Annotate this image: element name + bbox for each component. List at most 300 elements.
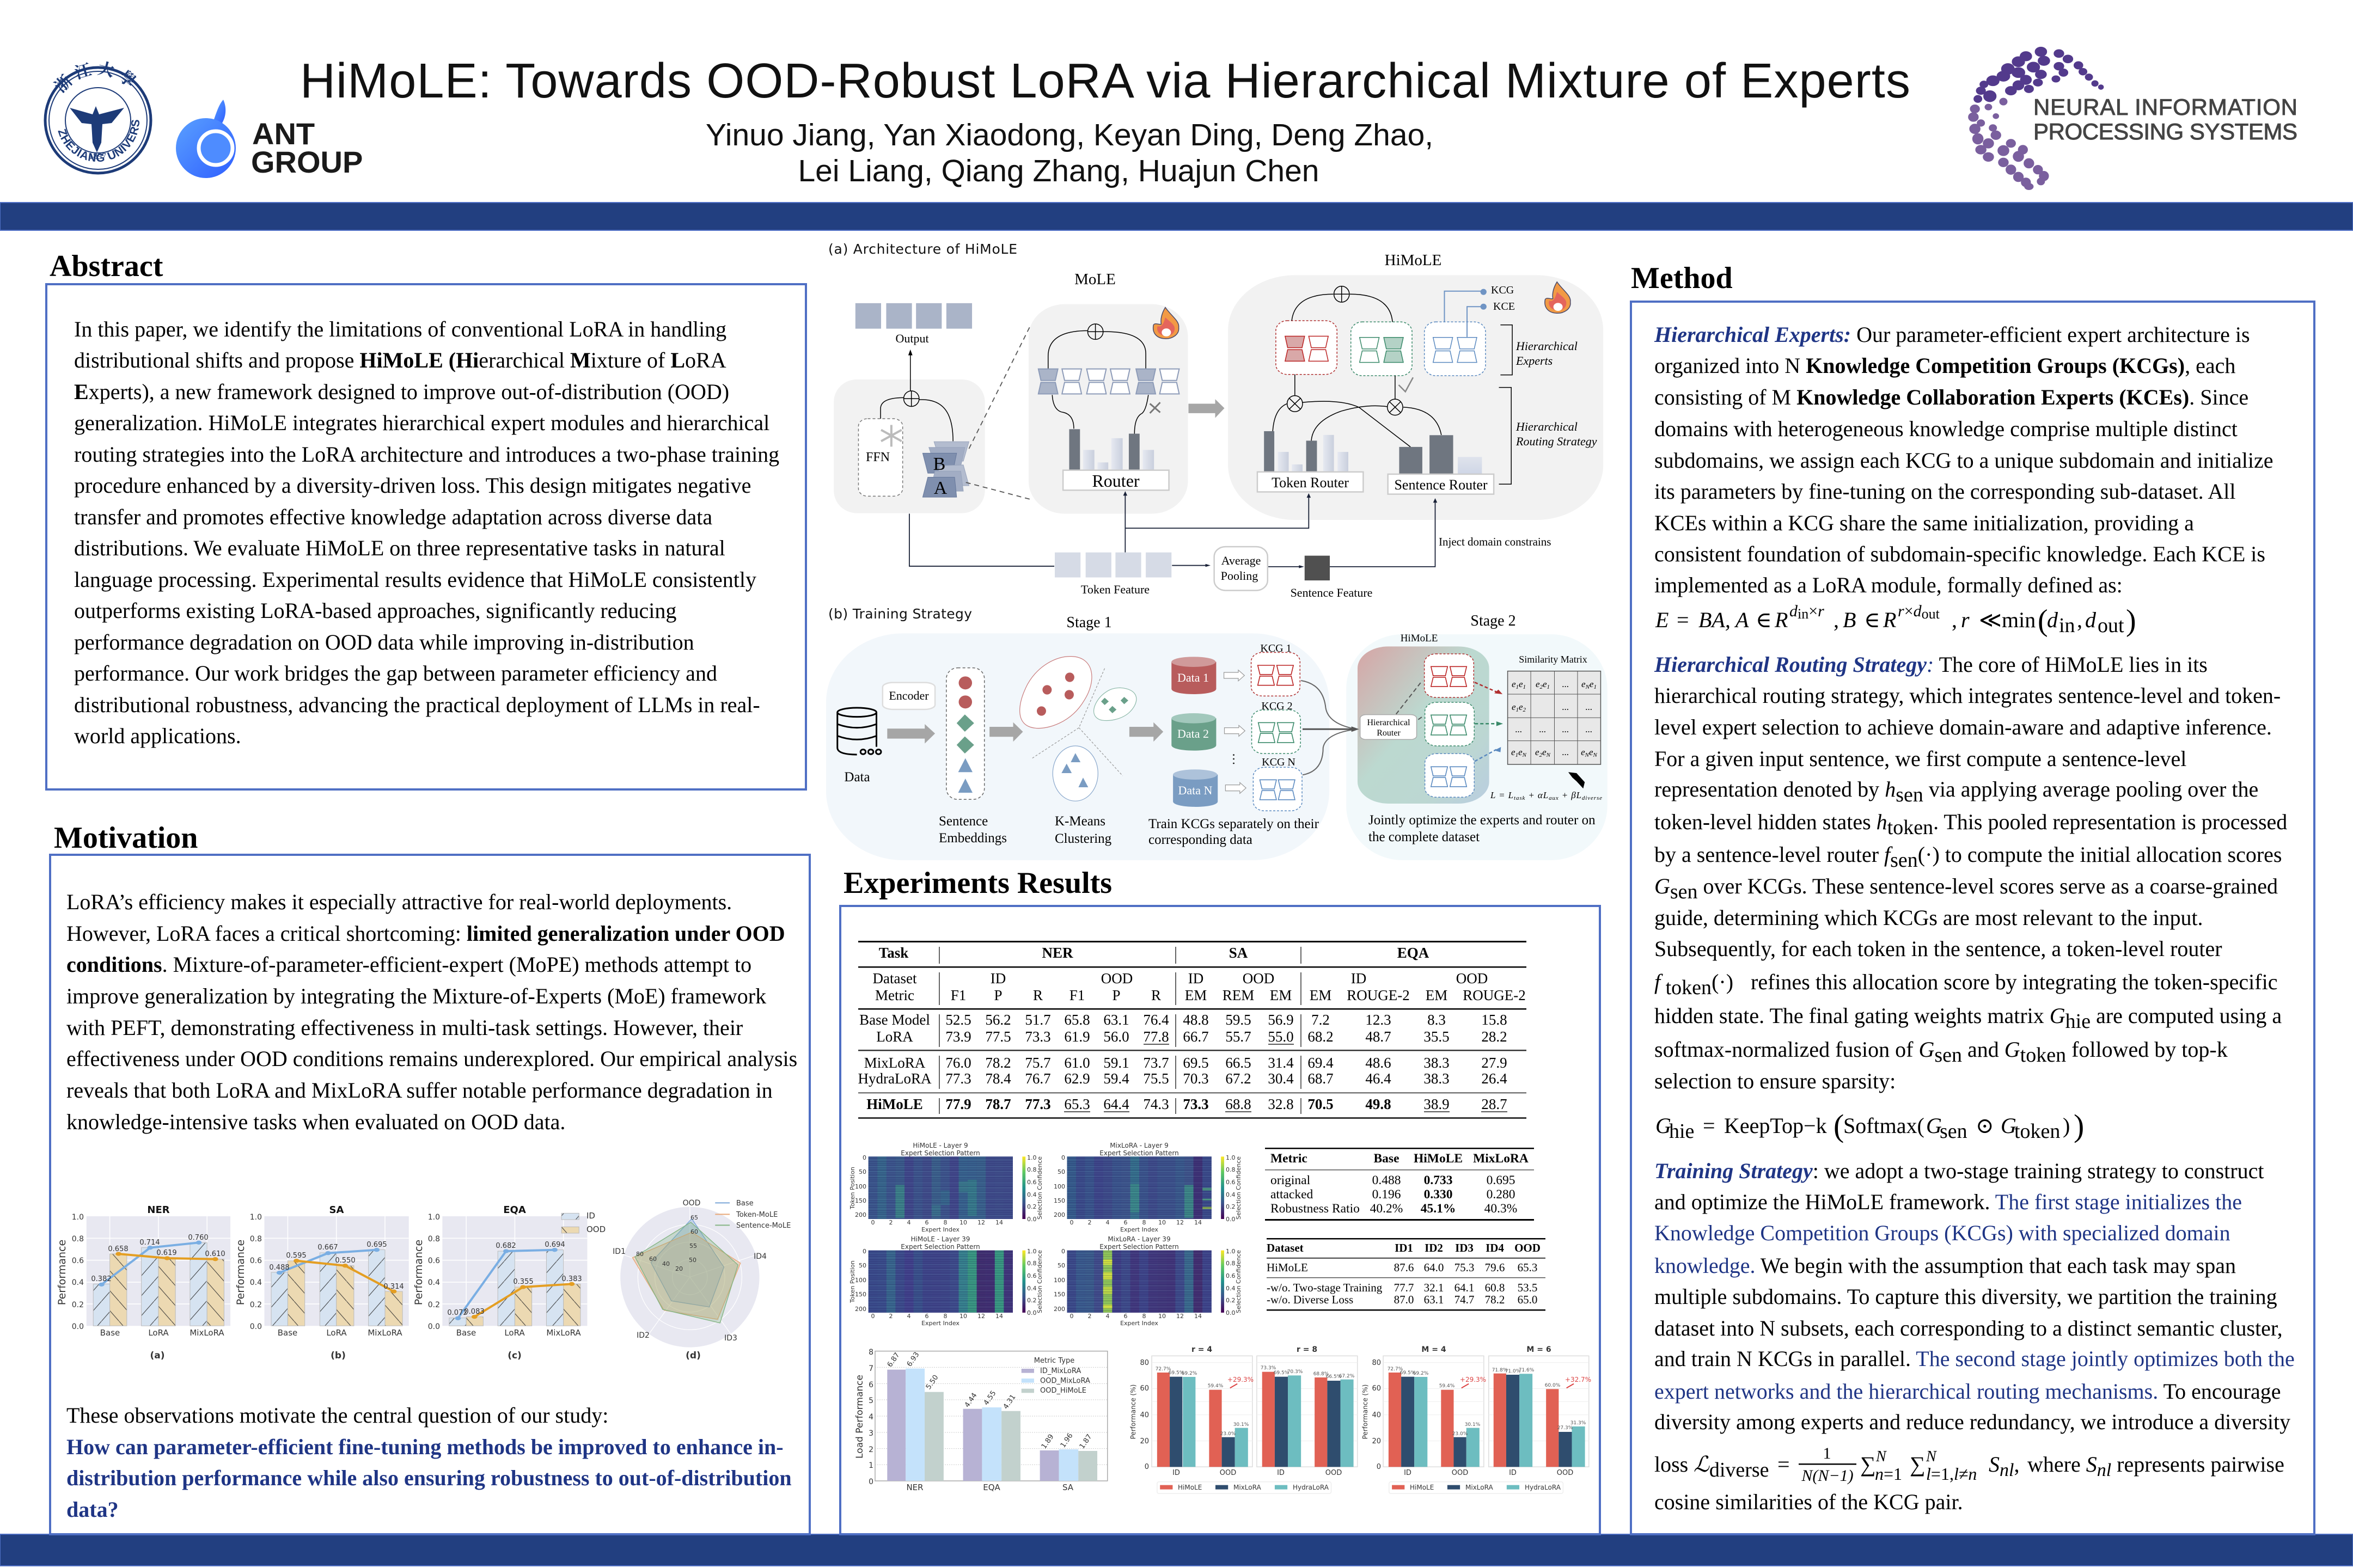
table: main results: Metric — [875, 987, 914, 1003]
heatmaps: expert selection pattern: 14 — [1194, 1313, 1202, 1320]
diagram labels b: L = L — [1490, 790, 1513, 800]
diagram labels b: N — [1585, 752, 1590, 758]
motivation text: How can parameter-efficient fine-tuning methods be improved to enhance in- — [66, 1435, 784, 1459]
table: main results: 48.8 — [1183, 1012, 1209, 1028]
table: main results: 51.7 — [1025, 1012, 1051, 1028]
method: training strategy: S — [1989, 1452, 2000, 1477]
chart: performance bars NER SA EQA: 0.550 — [335, 1257, 356, 1265]
chart: performance bars NER SA EQA: 0.488 — [269, 1264, 290, 1272]
heatmaps: expert selection pattern: 8 — [943, 1313, 948, 1320]
chart: hyperparameter sensitivity bars: OOD — [1325, 1469, 1342, 1477]
chart: hyperparameter sensitivity bars: 60 — [1140, 1385, 1149, 1393]
method: hierarchical routing strategy: sen — [1890, 849, 1918, 872]
table: ablation by dataset: 77.7 — [1394, 1281, 1414, 1294]
table: ablation by dataset: 75.3 — [1454, 1261, 1474, 1274]
method: training strategy: l=1,l≠n — [1926, 1464, 1977, 1484]
table: main results: EM — [1310, 987, 1331, 1003]
chart: hyperparameter sensitivity bars: 80 — [1140, 1359, 1149, 1367]
method: training strategy: nl — [2097, 1460, 2111, 1480]
chart: load performance: EQA — [983, 1483, 1001, 1492]
heatmaps: expert selection pattern: 100 — [855, 1183, 866, 1190]
table: main results: OOD — [1456, 970, 1488, 987]
diagram labels b: Train KCGs separately on their — [1148, 817, 1319, 831]
chart: performance bars NER SA EQA: 0.6 — [72, 1257, 84, 1265]
heatmaps: expert selection pattern: 0 — [1069, 1313, 1074, 1320]
chart: radar (d): 60 — [690, 1228, 698, 1235]
diagram labels b: Embeddings — [939, 831, 1007, 846]
chart: hyperparameter sensitivity bars: 20 — [1372, 1437, 1381, 1445]
heatmaps: expert selection pattern: 6 — [925, 1313, 929, 1320]
diagram labels a: Pooling — [1221, 569, 1258, 583]
heatmaps: expert selection pattern: 0.0 — [1027, 1216, 1037, 1223]
logo: Zhejiang University seal: 1897 — [89, 152, 106, 161]
diagram labels b: the complete dataset — [1368, 830, 1480, 844]
heatmaps: expert selection pattern: Expert Selection Pattern — [1099, 1149, 1179, 1157]
table: main results: 8.3 — [1427, 1012, 1446, 1028]
chart: load performance: ID_MixLoRA — [1040, 1367, 1081, 1375]
heading: Abstract: Abstract — [50, 249, 163, 283]
chart: performance bars NER SA EQA: MixLoRA — [546, 1328, 581, 1338]
heatmaps: expert selection pattern: 12 — [1176, 1219, 1184, 1226]
heatmaps: expert selection pattern: Expert Index — [1120, 1320, 1158, 1327]
table: main results: 67.2 — [1225, 1070, 1251, 1087]
chart: radar (d): ID1 — [613, 1247, 626, 1256]
heatmaps: expert selection pattern: 0.6 — [1027, 1179, 1037, 1186]
table: ablation by dataset: OOD — [1514, 1241, 1541, 1254]
table: main results: 74.3 — [1143, 1096, 1169, 1112]
diagram labels b: e — [1518, 747, 1523, 757]
chart: hyperparameter sensitivity bars: 69.5% — [1274, 1370, 1289, 1376]
chart: radar (d): Token-MoLE — [736, 1211, 778, 1219]
heatmaps: expert selection pattern: 50 — [859, 1262, 866, 1269]
table: robustness metrics: original — [1270, 1173, 1311, 1187]
chart: performance bars NER SA EQA: 0.6 — [250, 1257, 262, 1265]
table: main results: LoRA — [876, 1028, 913, 1045]
chart: performance bars NER SA EQA: 0.682 — [496, 1242, 516, 1250]
chart: performance bars NER SA EQA: 0.314 — [383, 1283, 404, 1291]
motivation text: reveals that both LoRA and MixLoRA suffer notable performance degradation in — [66, 1078, 773, 1102]
figure: (b) Training Strategy — [826, 606, 1608, 860]
chart: hyperparameter sensitivity bars: 70.3% — [1287, 1369, 1303, 1375]
method: hierarchical routing strategy: sen — [1896, 783, 1923, 806]
method: training strategy: = — [1777, 1452, 1790, 1477]
method: hierarchical experts: ×r — [1808, 602, 1824, 620]
abstract text: outperforms existing LoRA-based approaches, significantly reducing — [74, 598, 676, 623]
table: main results: 59.4 — [1103, 1070, 1129, 1087]
diagram labels a: Sentence Router — [1394, 477, 1488, 493]
table: main results: ROUGE-2 — [1347, 987, 1410, 1003]
diagram labels b: N — [1546, 752, 1551, 758]
diagram labels b: e — [1590, 679, 1594, 689]
table: ablation by dataset: 64.0 — [1424, 1261, 1444, 1274]
table: main results: 73.7 — [1143, 1055, 1169, 1071]
chart: hyperparameter sensitivity bars: r = 4 — [1191, 1345, 1212, 1354]
heatmaps: expert selection pattern: 2 — [1088, 1219, 1091, 1226]
motivation text: These observations motivate the central question of our study: — [66, 1403, 608, 1428]
method: hierarchical experts: organized into N Knowledge Competition Groups (KCGs), each — [1654, 353, 2235, 378]
diagram labels a: Hierarchical — [1515, 339, 1578, 353]
method: hierarchical experts: ∈ — [1756, 608, 1772, 632]
table: main results: 63.1 — [1103, 1012, 1129, 1028]
method: hierarchical routing strategy: are computed using a — [2091, 1003, 2282, 1028]
chart: load performance: Load Performance — [854, 1375, 865, 1459]
diagram labels a: Output — [895, 332, 929, 345]
diagram labels b: Sentence — [939, 814, 988, 829]
method: hierarchical routing strategy: Softmax( — [1843, 1113, 1924, 1138]
table: robustness metrics: 0.330 — [1424, 1187, 1452, 1202]
diagram labels b: Clustering — [1055, 831, 1112, 846]
method: training strategy: expert networks and the hierarchical routing mechanisms. To encourage — [1654, 1379, 2281, 1404]
method: hierarchical routing strategy: representation denoted by h — [1654, 777, 1896, 801]
method: hierarchical routing strategy: (·) to compute the initial allocation scores — [1918, 842, 2282, 867]
heatmaps: expert selection pattern: 4 — [907, 1219, 910, 1226]
diagram labels b: 1 — [1516, 707, 1519, 713]
chart: load performance: SA — [1062, 1483, 1074, 1492]
method: training strategy: ∑ — [1860, 1452, 1876, 1477]
diagram labels a: Sentence Feature — [1291, 586, 1372, 599]
table: ablation by dataset: ID2 — [1425, 1241, 1443, 1254]
method: hierarchical experts: in — [1798, 606, 1808, 622]
table: main results: REM — [1223, 987, 1254, 1003]
chart: radar (d): 65 — [690, 1214, 698, 1221]
table: main results: 68.8 — [1225, 1096, 1251, 1112]
heatmaps: expert selection pattern: 10 — [959, 1313, 967, 1320]
diagram labels b: Encoder — [889, 689, 929, 702]
figure label b: (b) Training Strategy — [828, 606, 972, 622]
heatmaps: expert selection pattern: 1.0 — [1226, 1248, 1235, 1255]
table: main results: OOD — [1243, 970, 1274, 987]
heatmaps: expert selection pattern: 2 — [889, 1313, 893, 1320]
chart: hyperparameter sensitivity bars: 72.7% — [1388, 1367, 1403, 1372]
diagram labels a: Routing Strategy — [1515, 434, 1597, 448]
panel: experiments results — [840, 906, 1600, 1534]
method: hierarchical routing strategy: ⊙ — [1976, 1113, 1994, 1138]
method: hierarchical experts: consistent foundation of subdomain-specific knowledge. Each KCE is — [1654, 542, 2265, 566]
table: robustness metrics: 0.695 — [1487, 1173, 1515, 1187]
method: hierarchical routing strategy: via applying average pooling over the — [1923, 777, 2258, 801]
authors: Lei Liang, Qiang Zhang, Huajun Chen — [798, 154, 1319, 188]
table: ablation by dataset: HiMoLE — [1267, 1261, 1308, 1274]
method: training strategy: ℒ — [1694, 1452, 1709, 1477]
chart: performance bars NER SA EQA: 0.694 — [545, 1241, 565, 1249]
diagram labels b: e — [1581, 679, 1586, 689]
chart: performance bars NER SA EQA: NER — [147, 1204, 170, 1216]
heatmaps: expert selection pattern: 150 — [855, 1197, 866, 1204]
chart: radar (d): 80 — [636, 1251, 644, 1258]
chart: performance bars NER SA EQA: 0.8 — [72, 1235, 84, 1244]
chart: performance bars NER SA EQA: 0.0 — [250, 1322, 262, 1331]
chart: radar (d): 40 — [662, 1260, 670, 1267]
diagram labels b: e — [1519, 679, 1523, 689]
diagram labels b: e — [1511, 747, 1515, 757]
table: main results: 15.8 — [1481, 1012, 1507, 1028]
heatmaps: expert selection pattern: 2 — [1088, 1313, 1091, 1320]
chart: performance bars NER SA EQA: 0.0 — [428, 1322, 440, 1331]
method: training strategy: n=1 — [1875, 1464, 1902, 1484]
method: hierarchical routing strategy: token — [2020, 1044, 2066, 1067]
heatmaps: expert selection pattern: 0 — [863, 1154, 866, 1161]
figure: (a) Architecture of HiMoLE — [828, 241, 1603, 599]
heatmaps: expert selection pattern: 0.8 — [1027, 1260, 1037, 1267]
diagram labels b: diverse — [1582, 795, 1602, 801]
table: main results: 61.0 — [1064, 1055, 1090, 1071]
diagram labels b: e — [1535, 747, 1539, 757]
table: main results: 38.3 — [1423, 1070, 1450, 1087]
method: hierarchical routing strategy: token — [1660, 976, 1712, 999]
chart: load performance — [854, 1348, 1108, 1492]
chart: performance bars NER SA EQA: 0.2 — [250, 1301, 262, 1309]
heatmaps: expert selection pattern: 150 — [1054, 1291, 1065, 1298]
diagram labels b: Hierarchical — [1367, 718, 1410, 727]
heatmaps: expert selection pattern: 0.8 — [1226, 1166, 1235, 1173]
chart: radar (d): Sentence-MoLE — [736, 1222, 791, 1230]
chart: hyperparameter sensitivity bars: MixLoRA — [1465, 1484, 1493, 1491]
abstract text: generalization. HiMoLE integrates hierarchical expert modules and hierarchical — [74, 411, 769, 435]
heatmaps: expert selection pattern: 150 — [855, 1291, 866, 1298]
method: hierarchical experts: R — [1883, 608, 1896, 632]
method: training strategy: diversity among experts and reduce redundancy, we introduce a diversity — [1654, 1410, 2290, 1434]
method: hierarchical experts: , — [1833, 608, 1839, 632]
chart: performance bars NER SA EQA: 1.0 — [72, 1213, 84, 1222]
heatmaps: expert selection pattern: 150 — [1054, 1197, 1065, 1204]
chart: load performance: 3 — [869, 1429, 873, 1438]
diagram labels b: N — [1585, 684, 1590, 690]
chart: performance bars NER SA EQA: 0.695 — [366, 1241, 387, 1249]
chart: performance bars NER SA EQA: 0.382 — [91, 1275, 112, 1283]
heatmaps: expert selection pattern: 50 — [1058, 1262, 1065, 1269]
table: main results: 76.0 — [945, 1055, 971, 1071]
chart: load performance: 4.55 — [982, 1389, 998, 1407]
heatmaps: expert selection pattern: 1.0 — [1226, 1154, 1235, 1161]
chart: hyperparameter sensitivity bars — [1129, 1345, 1591, 1493]
abstract text: distributional shifts and propose HiMoLE (Hierarchical Mixture of LoRA — [74, 348, 726, 372]
method: hierarchical experts: domains with heterogeneous knowledge comprise multiple distinct — [1654, 416, 2238, 441]
heatmaps: expert selection pattern: 0.6 — [1226, 1272, 1235, 1279]
table: main results: 38.9 — [1423, 1096, 1450, 1112]
method: hierarchical experts: subdomains, we assign each KCG to a unique subdomain and initialize — [1654, 448, 2273, 473]
method: training strategy: N — [1875, 1448, 1887, 1465]
heatmaps: expert selection pattern: 4 — [1105, 1219, 1110, 1226]
table: main results: Dataset — [873, 970, 917, 987]
diagram labels b: KCG 1 — [1260, 642, 1292, 654]
chart: performance bars NER SA EQA: 0.4 — [250, 1278, 262, 1287]
logo: Zhejiang University seal: 浙江大學 — [53, 61, 136, 93]
table: main results: 75.5 — [1143, 1070, 1169, 1087]
method: hierarchical routing strategy: hierarchical routing strategy, which integrates sentence-level and token- — [1654, 683, 2281, 708]
table: main results: 52.5 — [945, 1012, 971, 1028]
table: main results: 66.5 — [1225, 1055, 1251, 1071]
table: main results: SA — [1229, 945, 1248, 961]
table: main results: 66.7 — [1183, 1028, 1209, 1045]
heatmaps: expert selection pattern: 0.2 — [1226, 1203, 1235, 1210]
table: main results: EM — [1185, 987, 1207, 1003]
chart: radar (d): ID4 — [754, 1252, 767, 1261]
motivation text: improve generalization by integrating the Mixture-of-Experts (MoE) framework — [66, 984, 766, 1008]
diagram labels b: Stage 1 — [1066, 614, 1112, 631]
diagram labels a: Token Router — [1272, 475, 1349, 491]
motivation text: with PEFT, demonstrating effectiveness in multi-task settings. However, their — [66, 1015, 743, 1040]
diagram labels a: Average — [1221, 554, 1261, 567]
method: hierarchical routing strategy — [1654, 652, 2287, 1143]
table: ablation by dataset — [1267, 1238, 1545, 1311]
chart: load performance: 1.96 — [1059, 1432, 1075, 1449]
diagram labels b: KCG 2 — [1261, 700, 1293, 712]
table: main results: 59.1 — [1103, 1055, 1129, 1071]
table: main results: ID — [1188, 970, 1203, 987]
method: training strategy — [1654, 1159, 2295, 1514]
table: main results: 28.2 — [1481, 1028, 1507, 1045]
panel: abstract — [46, 284, 806, 789]
heatmaps: expert selection pattern: Expert Selection Pattern — [1099, 1243, 1179, 1251]
diagram labels b: ... — [1515, 724, 1522, 734]
table: main results: ROUGE-2 — [1463, 987, 1526, 1003]
chart: hyperparameter sensitivity bars: 67.2% — [1339, 1374, 1355, 1379]
diagram labels a: Token Feature — [1081, 583, 1150, 596]
diagram labels a — [866, 252, 1597, 599]
table: robustness metrics: 45.1% — [1421, 1202, 1456, 1216]
heatmaps: expert selection pattern: Selection Confidence — [1235, 1156, 1242, 1220]
heatmaps: expert selection pattern: Selection Confidence — [1036, 1250, 1043, 1313]
table: ablation by dataset: 65.0 — [1518, 1293, 1537, 1306]
chart: hyperparameter sensitivity bars: 30.1% — [1233, 1422, 1249, 1428]
chart: hyperparameter sensitivity bars: 40 — [1140, 1411, 1149, 1419]
method: hierarchical experts: Hierarchical Experts: Our parameter-efficient expert architecture is — [1654, 322, 2250, 347]
chart: load performance: 6.93 — [906, 1351, 921, 1368]
diagram labels b: e — [1542, 747, 1547, 757]
method: hierarchical experts: , — [1952, 608, 1957, 632]
table: main results: 32.8 — [1268, 1096, 1294, 1112]
diagram labels a: KCG — [1491, 284, 1514, 296]
heatmaps: expert selection pattern: Expert Selection Pattern — [901, 1149, 980, 1157]
logo: Ant Group — [176, 100, 363, 179]
heatmaps: expert selection pattern: 6 — [1124, 1313, 1127, 1320]
chart: performance bars NER SA EQA: EQA — [503, 1204, 526, 1216]
chart: hyperparameter sensitivity bars: 59.4% — [1439, 1383, 1455, 1389]
diagram labels b: corresponding data — [1148, 832, 1252, 847]
chart: hyperparameter sensitivity bars: 71.8% — [1492, 1368, 1508, 1373]
motivation text: knowledge-intensive tasks when evaluated on OOD data. — [66, 1110, 565, 1134]
heatmaps: expert selection pattern: 0.4 — [1226, 1191, 1235, 1198]
logo: NeurIPS: PROCESSING SYSTEMS — [2033, 119, 2297, 144]
table: main results: 12.3 — [1365, 1012, 1391, 1028]
heatmaps: expert selection pattern: 6 — [1124, 1219, 1127, 1226]
abstract text: performance. Our work bridges the gap between parameter efficiency and — [74, 661, 717, 685]
diagram labels a: Hierarchical — [1515, 420, 1578, 433]
table: ablation by dataset: 87.6 — [1394, 1261, 1414, 1274]
chart: radar (d): (d) — [686, 1350, 701, 1361]
table: main results: EM — [1270, 987, 1292, 1003]
method: hierarchical experts: its parameters by fine-tuning on the corresponding sub-dataset. All — [1654, 479, 2236, 504]
table: main results: 49.8 — [1365, 1096, 1391, 1112]
chart: performance bars NER SA EQA: Performance — [235, 1240, 247, 1305]
diagram labels a: Router — [1092, 471, 1140, 491]
diagram labels b: 1 — [1516, 684, 1519, 690]
chart: hyperparameter sensitivity bars: HiMoLE — [1410, 1484, 1434, 1491]
table: main results: 27.9 — [1481, 1055, 1507, 1071]
method: hierarchical experts: r — [1898, 602, 1904, 620]
table: robustness metrics: 0.733 — [1424, 1173, 1452, 1187]
table: ablation by dataset: Dataset — [1267, 1241, 1304, 1254]
chart: hyperparameter sensitivity bars: +29.3% — [1227, 1376, 1254, 1383]
heatmaps: expert selection pattern: 0.8 — [1226, 1260, 1235, 1267]
method: hierarchical routing strategy: ( — [1833, 1108, 1844, 1143]
chart: radar (d) — [613, 1199, 791, 1361]
chart: performance bars NER SA EQA: Base — [456, 1328, 476, 1338]
diagram labels b: KCG N — [1262, 756, 1295, 768]
table: main results: 70.3 — [1183, 1070, 1209, 1087]
chart: hyperparameter sensitivity bars: 69.2% — [1413, 1371, 1429, 1376]
table: ablation by dataset: 78.2 — [1485, 1293, 1505, 1306]
logo: Ant Group: ANT — [252, 117, 315, 151]
heatmaps: expert selection pattern: 200 — [1054, 1306, 1065, 1313]
heatmaps: expert selection pattern: 8 — [1142, 1313, 1146, 1320]
table: main results: P — [994, 987, 1003, 1003]
table: main results: R — [1033, 987, 1043, 1003]
chart: performance bars NER SA EQA: (b) — [331, 1350, 346, 1361]
chart: performance bars NER SA EQA: 1.0 — [250, 1213, 262, 1222]
chart: performance bars NER SA EQA: (a) — [150, 1350, 165, 1361]
diagram labels b: K-Means — [1055, 814, 1105, 829]
heatmaps: expert selection pattern: 0.8 — [1027, 1166, 1037, 1173]
table: robustness metrics: 0.196 — [1372, 1187, 1401, 1202]
abstract text: procedure enhanced by a diversity-driven loss. This design mitigates negative — [74, 473, 751, 498]
method: hierarchical experts: ×d — [1904, 602, 1922, 620]
chart: performance bars NER SA EQA: ID — [586, 1211, 595, 1221]
heatmaps: expert selection pattern: Selection Confidence — [1036, 1156, 1043, 1220]
table: main results: 56.0 — [1103, 1028, 1129, 1045]
heatmaps: expert selection pattern: 4 — [1105, 1313, 1110, 1320]
method: hierarchical experts: BA, — [1698, 608, 1731, 632]
table: ablation by dataset: -w/o. Diverse Loss — [1267, 1293, 1353, 1306]
chart: hyperparameter sensitivity bars: ID — [1277, 1469, 1285, 1477]
diagram labels a: FFN — [866, 450, 890, 464]
heatmaps: expert selection pattern: 200 — [855, 1211, 866, 1218]
table: ablation by dataset: 74.7 — [1454, 1293, 1474, 1306]
table: main results: 55.7 — [1225, 1028, 1251, 1045]
chart: performance bars NER SA EQA: 0.083 — [464, 1308, 485, 1316]
table: main results: 65.8 — [1064, 1012, 1090, 1028]
heatmaps: expert selection pattern: Token Position — [849, 1260, 856, 1303]
table: main results: 73.3 — [1183, 1096, 1209, 1112]
diagram labels b: 2 — [1540, 684, 1543, 690]
heatmaps: expert selection pattern: HiMoLE - Layer 39 — [911, 1235, 970, 1243]
chart: performance bars NER SA EQA: Base — [278, 1328, 297, 1338]
diagram labels b: e — [1512, 679, 1516, 689]
diagram labels b: + αL — [1525, 790, 1548, 800]
table: ablation by dataset: -w/o. Two-stage Training — [1267, 1281, 1383, 1294]
heatmaps: expert selection pattern — [849, 1142, 1242, 1327]
heatmaps: expert selection pattern: 10 — [1158, 1313, 1166, 1320]
heatmaps: expert selection pattern: Expert Index — [1120, 1226, 1158, 1233]
chart: performance bars NER SA EQA: Performance — [56, 1240, 68, 1305]
table: main results: ID — [1351, 970, 1366, 987]
stage panels and diagram shapes — [826, 633, 1608, 860]
table: robustness metrics: MixLoRA — [1473, 1152, 1529, 1166]
heatmaps: expert selection pattern: 14 — [995, 1219, 1003, 1226]
diagram labels b: ... — [1562, 724, 1569, 734]
table: robustness metrics: Metric — [1270, 1152, 1307, 1166]
heatmaps: expert selection pattern: 12 — [977, 1219, 985, 1226]
diagram labels b: Similarity Matrix — [1519, 654, 1587, 665]
heatmaps: expert selection pattern: 0.2 — [1027, 1297, 1037, 1304]
heatmaps: expert selection pattern: 10 — [959, 1219, 967, 1226]
method: hierarchical routing strategy: ) — [2063, 1113, 2070, 1138]
method: training strategy: multiple subdomains. To capture this diversity, we partition the training — [1654, 1284, 2277, 1309]
chart: performance bars NER SA EQA: 0.8 — [428, 1235, 440, 1244]
table: robustness metrics — [1265, 1148, 1534, 1221]
abstract text: transfer and promotes effective knowledge adaptation across diverse data — [74, 505, 712, 529]
chart: performance bars NER SA EQA: 0.8 — [250, 1235, 262, 1244]
